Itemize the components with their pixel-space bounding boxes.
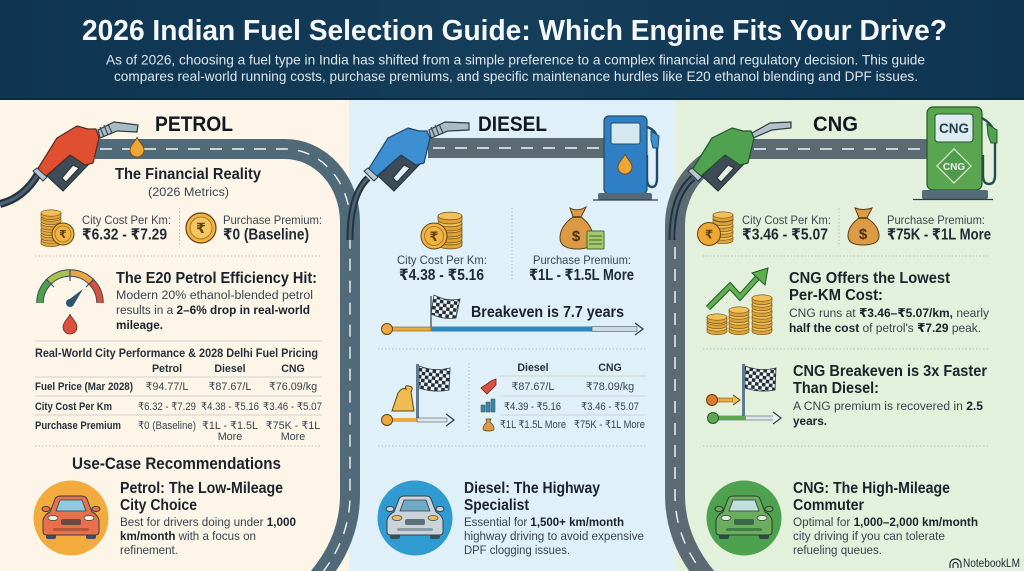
recommendation: diesel: Specialist: [464, 497, 530, 514]
metric: purchase premium: ₹75K - ₹1L More: [887, 226, 991, 244]
icon: money bag: [848, 208, 879, 245]
table: diesel vs cng: [481, 362, 646, 431]
icon: coin stack: ₹: [59, 229, 67, 241]
callout: e20 efficiency hit: Modern 20% ethanol-blended petrol: [116, 288, 313, 302]
metric: city cost per km: [742, 213, 831, 244]
icon: small money bag: [483, 419, 494, 431]
recommendation: cng: refueling queues.: [793, 543, 882, 557]
recommendation: cng: CNG: The High-Mileage: [793, 480, 950, 497]
metric: purchase premium: [223, 213, 322, 244]
icon: efficiency gauge: [40, 270, 100, 334]
table: city performance and fuel pricing: Purchase Premium: [35, 420, 121, 432]
heading: breakeven is 7.7 years: Breakeven is 7.7 years: [471, 304, 624, 321]
metric: city cost per km: City Cost Per Km:: [742, 213, 831, 227]
icon: fuel drop: [130, 137, 144, 157]
metric: purchase premium: [529, 253, 634, 284]
icon: breakeven flag with weight: [382, 364, 454, 426]
table: city performance and fuel pricing: ₹3.46 - ₹5.07: [263, 401, 322, 413]
table: city performance and fuel pricing: ₹4.38 - ₹5.16: [201, 401, 259, 413]
table: diesel vs cng: ₹87.67/L: [512, 381, 554, 393]
callout: cng breakeven: years.: [793, 414, 827, 428]
icon: diesel nozzle: [350, 122, 469, 240]
chart: breakeven progress arrow: [382, 295, 643, 335]
table: diesel vs cng: ₹78.09/kg: [586, 381, 634, 393]
icon: cng pump: [913, 107, 997, 200]
icon: cng pump: CNG: [939, 121, 969, 136]
recommendation: cng: Commuter: [793, 497, 864, 514]
icon: petrol nozzle: [0, 122, 138, 204]
icon: diesel car: [378, 480, 452, 556]
callout: e20 efficiency hit: mileage.: [116, 318, 163, 332]
metric: city cost per km: ₹6.32 - ₹7.29: [82, 226, 167, 244]
heading: the financial reality: The Financial Reality: [115, 166, 261, 183]
heading: diesel: DIESEL: [478, 113, 547, 136]
road: cng route: [675, 149, 928, 571]
recommendation: petrol: Petrol: The Low-Mileage: [120, 480, 283, 497]
recommendation: diesel: [464, 480, 644, 557]
metric: city cost per km: [82, 213, 171, 244]
recommendation: diesel: Diesel: The Highway: [464, 480, 600, 497]
icon: price tag: [481, 379, 496, 394]
panel: petrol: [0, 113, 322, 557]
icon: petrol car: [34, 480, 108, 556]
heading: cng: CNG: [813, 113, 858, 136]
recommendation: diesel: Essential for 1,500+ km/month: [464, 515, 624, 529]
callout: cng breakeven: [793, 363, 987, 428]
table: city performance and fuel pricing: More: [281, 431, 305, 443]
recommendation: cng: city driving if you can tolerate: [793, 529, 945, 543]
table: city performance and fuel pricing: Petrol: [152, 363, 182, 375]
callout: e20 efficiency hit: The E20 Petrol Efficiency Hit:: [116, 270, 317, 287]
table: city performance and fuel pricing: ₹75K - ₹1L: [266, 420, 320, 432]
metric: city cost per km: ₹3.46 - ₹5.07: [742, 226, 828, 244]
callout: lowest per-km cost: [789, 270, 990, 335]
callout: lowest per-km cost: CNG Offers the Lowest: [789, 270, 951, 287]
table: city performance and fuel pricing: City Cost Per Km: [35, 401, 112, 413]
icon: cng pump: CNG: [943, 162, 965, 173]
table: city performance and fuel pricing: Fuel Price (Mar 2028): [35, 381, 133, 393]
table: city performance and fuel pricing: [35, 346, 322, 443]
icon: bars: [481, 399, 495, 412]
table: diesel vs cng: ₹75K - ₹1L More: [574, 419, 645, 431]
table: diesel vs cng: Diesel: [517, 362, 549, 374]
table: city performance and fuel pricing: ₹76.09/kg: [269, 381, 317, 393]
table: city performance and fuel pricing: Diesel: [214, 363, 246, 375]
table: city performance and fuel pricing: CNG: [281, 363, 305, 375]
icon: coin stack: [421, 212, 462, 249]
callout: lowest per-km cost: CNG runs at ₹3.46–₹5.07/km, nearly: [789, 306, 990, 320]
icon: money bag: [560, 207, 604, 249]
recommendation: petrol: Best for drivers doing under 1,000: [120, 515, 296, 529]
table: city performance and fuel pricing: ₹6.32 - ₹7.29: [138, 401, 196, 413]
callout: e20 efficiency hit: results in a 2–6% drop in real-world: [116, 303, 310, 317]
callout: cng breakeven: A CNG premium is recovered in 2.5: [793, 399, 983, 413]
table: diesel vs cng: ₹1L ₹1.5L More: [500, 419, 566, 431]
recommendation: petrol: [120, 480, 296, 557]
metric: purchase premium: Purchase Premium:: [887, 213, 985, 227]
subtitle: compares real-world running costs, purchase premiums, and specific maintenance hurdles like E20 ethanol blending and DPF issues.: [114, 69, 918, 84]
recommendation: diesel: highway driving to avoid expensive: [464, 529, 644, 543]
subtitle: [106, 52, 925, 84]
recommendation: cng: [793, 480, 978, 557]
panel: cng: [672, 107, 1020, 570]
title: 2026 Indian Fuel Selection Guide: Which Engine Fits Your Drive?: [82, 15, 947, 47]
table: city performance and fuel pricing: Real-World City Performance & 2028 Delhi Fuel Pricing: [35, 346, 318, 360]
callout: cng breakeven: CNG Breakeven is 3x Faster: [793, 363, 987, 380]
recommendation: diesel: DPF clogging issues.: [464, 543, 570, 557]
icon: coin stack: [41, 210, 74, 247]
metric: city cost per km: ₹4.38 - ₹5.16: [399, 267, 484, 284]
icon: diesel pump: [593, 116, 659, 200]
recommendation: petrol: km/month with a focus on: [120, 529, 256, 543]
callout: lowest per-km cost: half the cost of petrol's ₹7.29 peak.: [789, 321, 981, 335]
recommendation: petrol: City Choice: [120, 497, 197, 514]
callout: e20 efficiency hit: [116, 270, 317, 332]
icon: money bag: $: [859, 226, 868, 243]
panel: diesel: [350, 113, 659, 557]
metric: purchase premium: [887, 213, 991, 244]
recommendation: petrol: refinement.: [120, 543, 178, 557]
table: city performance and fuel pricing: ₹1L - ₹1.5L: [202, 420, 258, 432]
metric: city cost per km: City Cost Per Km:: [397, 253, 487, 267]
subtitle: As of 2026, choosing a fuel type in India has shifted from a simple preference to a complex financial and regulatory decision. This guide: [106, 52, 925, 68]
metric: city cost per km: [397, 253, 487, 284]
callout: lowest per-km cost: Per-KM Cost:: [789, 287, 883, 304]
table: city performance and fuel pricing: ₹87.67/L: [209, 381, 251, 393]
table: diesel vs cng: ₹3.46 - ₹5.07: [581, 401, 639, 413]
icon: coin stack: ₹: [429, 229, 439, 244]
metric: purchase premium: ₹1L - ₹1.5L More: [529, 267, 634, 284]
header banner: [0, 0, 1024, 100]
subheading: metrics: (2026 Metrics): [148, 185, 229, 199]
table: city performance and fuel pricing: More: [218, 431, 242, 443]
icon: money bag: $: [572, 228, 581, 245]
road: diesel route: [428, 138, 606, 158]
metric: purchase premium: Purchase Premium:: [223, 213, 322, 227]
icon: rupee coin: ₹: [196, 220, 206, 236]
metric: city cost per km: City Cost Per Km:: [82, 213, 171, 227]
icon: coin stack: ₹: [705, 228, 713, 242]
heading: use-case recommendations: Use-Case Recommendations: [72, 454, 281, 473]
icon: cng nozzle: [672, 122, 791, 240]
table: city performance and fuel pricing: ₹94.77/L: [146, 381, 188, 393]
metric: purchase premium: Purchase Premium:: [533, 253, 631, 267]
icon: coin stack: [698, 212, 733, 246]
callout: cng breakeven: Than Diesel:: [793, 380, 879, 397]
icon: rising cost chart with coins: [707, 268, 772, 335]
recommendation: cng: Optimal for 1,000–2,000 km/month: [793, 515, 978, 529]
heading: petrol: PETROL: [155, 113, 233, 136]
table: city performance and fuel pricing: ₹0 (Baseline): [138, 420, 196, 432]
table: diesel vs cng: CNG: [598, 362, 622, 374]
icon: cng car: [706, 480, 782, 556]
icon: breakeven flag with two arrows: [706, 364, 781, 424]
metric: purchase premium: ₹0 (Baseline): [223, 226, 309, 244]
road: petrol route: [95, 149, 350, 571]
table: diesel vs cng: ₹4.39 - ₹5.16: [504, 401, 561, 413]
icon: rupee coin: [186, 213, 216, 243]
